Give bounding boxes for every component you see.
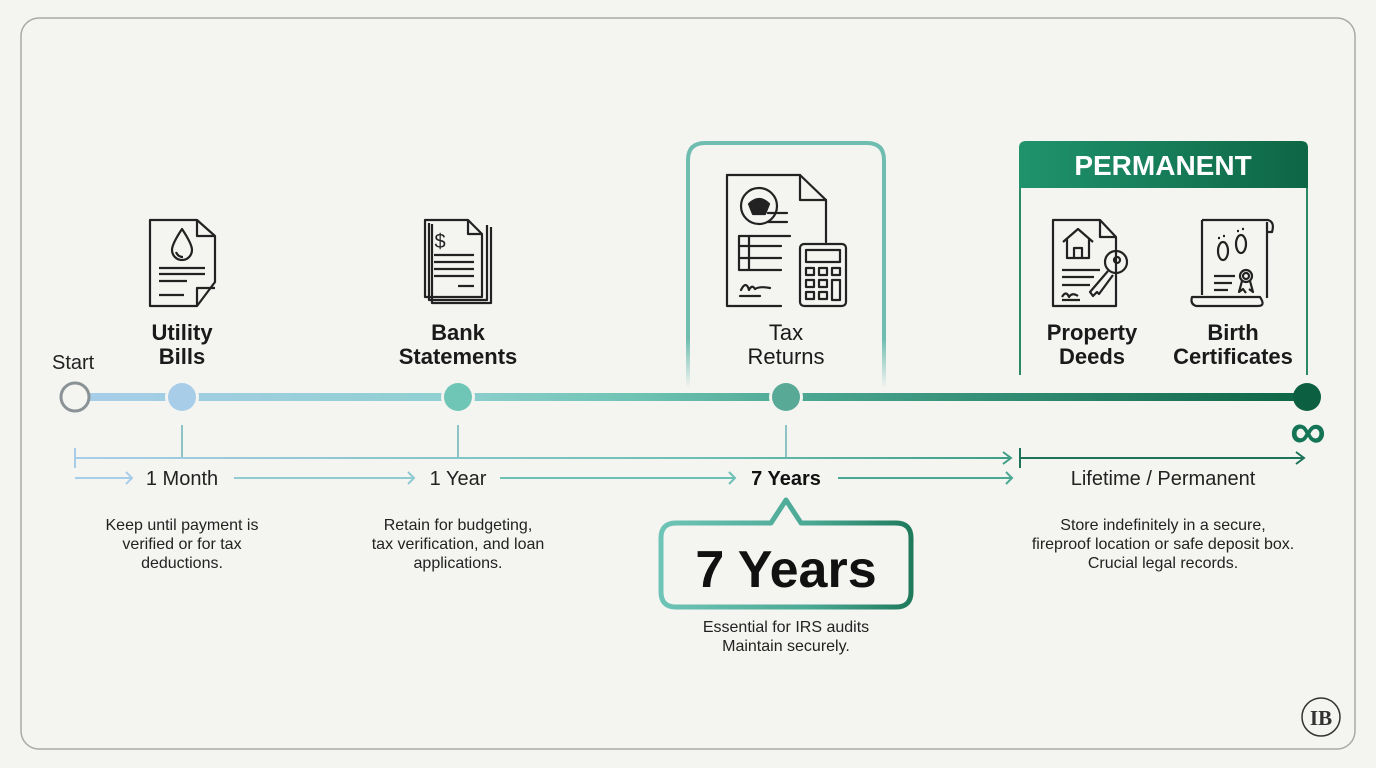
text: permanent description: Crucial legal records. <box>1088 555 1238 572</box>
label: property deeds: Property <box>1047 320 1138 345</box>
text: Lifetime / Permanent <box>1071 468 1256 490</box>
text: permanent description: Store indefinitely in a secure, <box>1060 517 1266 534</box>
icon: birth certificate <box>1192 220 1273 306</box>
callout: 7 years: 7 Years <box>695 541 877 599</box>
panel: permanent box <box>1019 141 1308 375</box>
icon: infinity: ∞ <box>1290 403 1326 459</box>
label: tax returns: Tax <box>769 320 803 345</box>
label: birth certificates: Birth <box>1207 320 1259 345</box>
heading: permanent: PERMANENT <box>1074 150 1252 181</box>
label: tax returns: Returns <box>747 344 825 369</box>
text: bank description: applications. <box>414 555 502 572</box>
axis labels: 1 Month <box>146 468 218 490</box>
text: utility description: verified or for tax <box>122 536 242 553</box>
icon: tax returns <box>727 175 846 306</box>
icon: bank statements: $ <box>434 231 446 253</box>
heading: permanent <box>1019 141 1308 188</box>
label: utility bills: Bills <box>159 344 205 369</box>
text: permanent description: fireproof location or safe deposit box. <box>1032 536 1294 553</box>
icon: utility bill <box>150 220 215 306</box>
label: birth certificates: Certificates <box>1173 344 1293 369</box>
text: utility description: deductions. <box>141 555 223 572</box>
text: utility description: Keep until payment is <box>106 517 258 534</box>
panel: tax returns highlight box <box>688 143 884 388</box>
node: 1 month <box>165 380 199 414</box>
text: 7 Years <box>751 468 821 490</box>
node: start <box>61 383 89 411</box>
label: utility bills: Utility <box>151 320 213 345</box>
label: bank statements: Bank <box>431 320 486 345</box>
text: 1 Year <box>430 468 487 490</box>
icon: bank statements <box>425 220 491 303</box>
label: bank statements: Statements <box>399 344 517 369</box>
text: bank description: Retain for budgeting, <box>384 517 532 534</box>
timeline <box>61 380 1321 414</box>
label: property deeds: Deeds <box>1059 344 1125 369</box>
text: bank description: tax verification, and loan <box>372 536 544 553</box>
node: 1 year <box>441 380 475 414</box>
callout: 7 years <box>661 500 911 607</box>
label: start: Start <box>52 352 95 374</box>
icon: property deed <box>1053 220 1127 306</box>
node: permanent <box>1293 383 1321 411</box>
text: tax description: Maintain securely. <box>722 638 850 655</box>
logo: IB: IB <box>1310 706 1332 730</box>
logo: IB <box>1302 698 1340 736</box>
text: tax description: Essential for IRS audits <box>703 619 869 636</box>
node: 7 years <box>769 380 803 414</box>
axis with ticks <box>75 425 1304 484</box>
